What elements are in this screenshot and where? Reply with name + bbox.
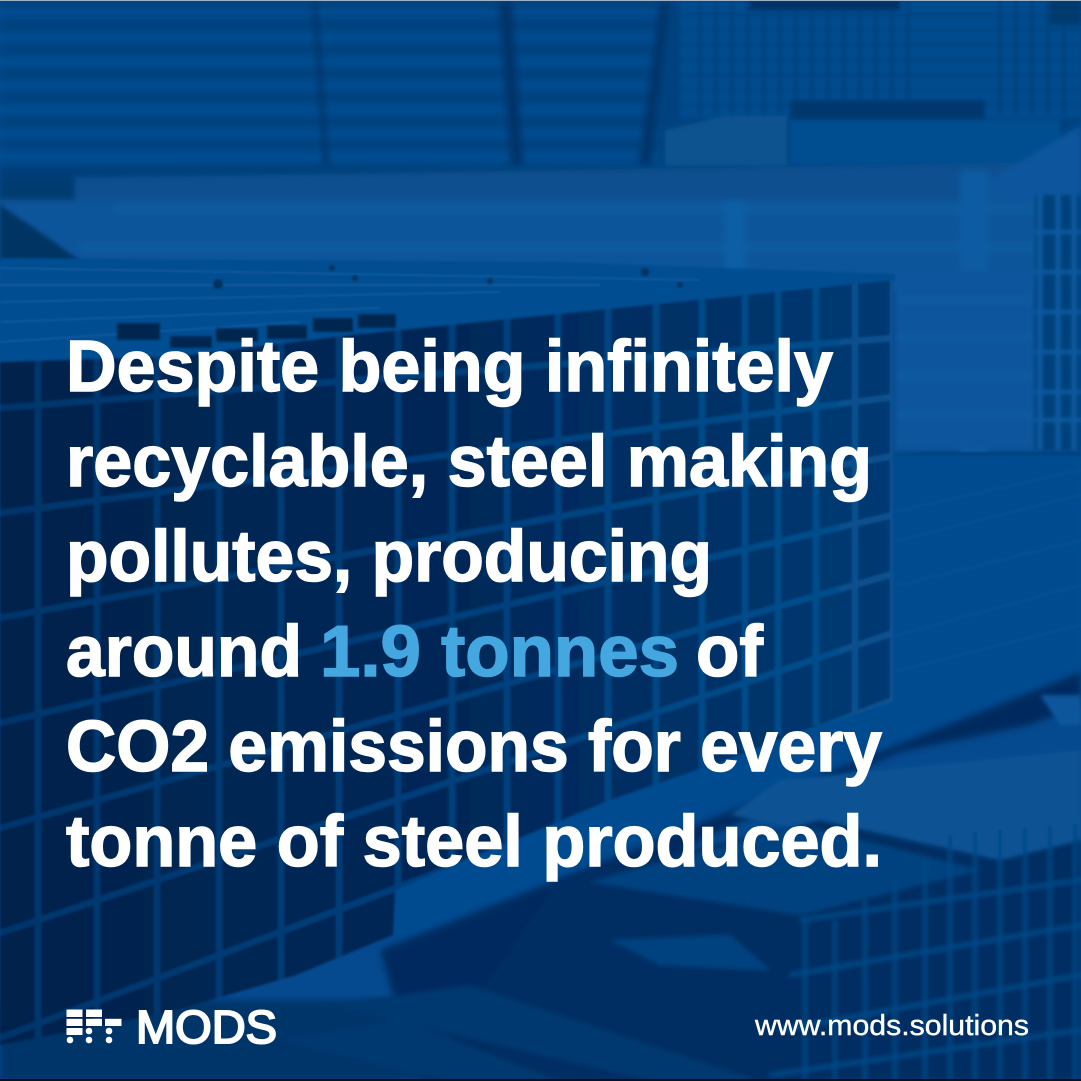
background: pale stacked beams in the middle band (0, 125, 1081, 460)
background: blurred rails at top (0, 0, 1081, 178)
headline line 4: of (696, 612, 764, 692)
background: right tube stack (1035, 195, 1081, 450)
headline line 5: CO2 emissions for every (66, 707, 882, 787)
background: beam side, right of main stack (380, 452, 1081, 965)
headline line 6: tonne of steel produced. (66, 802, 882, 882)
background: dark wedge at left edge (0, 205, 82, 272)
headline (66, 327, 882, 882)
background: mesh of tube ends, upper right (665, 0, 1081, 166)
background: dark floor behind lower stacks (0, 1000, 820, 1081)
headline line 4 (66, 612, 764, 692)
logo wordmark: MODS (136, 1001, 277, 1053)
background: shadow under the beam (380, 672, 1081, 1020)
icon: MODS mark (66, 1010, 122, 1043)
headline line 1: Despite being infinitely (66, 327, 833, 407)
headline line 2: recyclable, steel making (66, 422, 872, 502)
background: main tube stack (0, 258, 895, 1060)
highlighted figure: 1.9 tonnes (320, 612, 679, 692)
background: edge lines (0, 0, 1081, 1)
website url: www.mods.solutions (754, 1010, 1029, 1042)
background: lower right pale strips and tubes (280, 695, 1081, 1081)
logo: MODS (66, 1001, 277, 1053)
headline line 4: around (66, 612, 302, 692)
headline line 3: pollutes, producing (66, 517, 712, 597)
